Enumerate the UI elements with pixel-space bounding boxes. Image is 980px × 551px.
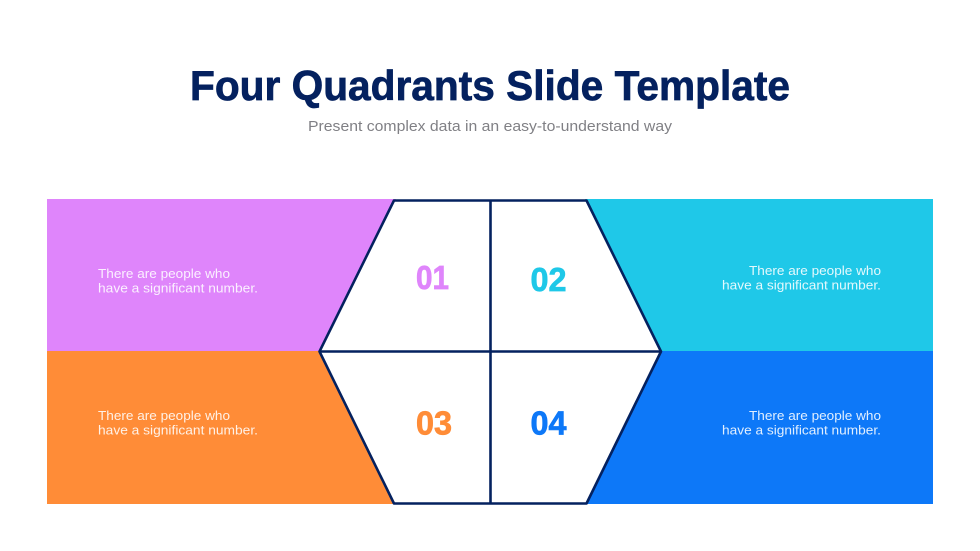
- number 02: 02: [530, 261, 566, 298]
- text block: top left: [98, 266, 258, 296]
- number 03: 03: [416, 404, 452, 442]
- text block: top left: have a significant number.: [98, 280, 258, 296]
- panel: bottom right blue: [585, 351, 933, 504]
- text block: bottom right: [722, 408, 881, 438]
- text block: bottom left: [98, 408, 258, 438]
- text block: top right: [722, 263, 881, 292]
- text block: top right: There are people who: [749, 263, 881, 278]
- panel: bottom left orange: [47, 351, 396, 504]
- number 01: 01: [416, 259, 449, 296]
- text block: bottom left: There are people who: [98, 408, 230, 423]
- text block: bottom right: have a significant number.: [722, 422, 881, 438]
- text block: bottom right: There are people who: [749, 408, 881, 423]
- text block: top right: have a significant number.: [722, 278, 881, 292]
- central hexagon with quadrant dividers: [320, 200, 661, 504]
- text block: bottom left: have a significant number.: [98, 422, 258, 438]
- panel: top right cyan: [585, 199, 933, 351]
- text block: top left: There are people who: [98, 266, 230, 281]
- subtitle: Present complex data in an easy-to-understand way: [308, 118, 673, 135]
- title: Four Quadrants Slide Template: [190, 62, 790, 109]
- panel: top left purple: [47, 199, 396, 351]
- number 04: 04: [530, 404, 567, 442]
